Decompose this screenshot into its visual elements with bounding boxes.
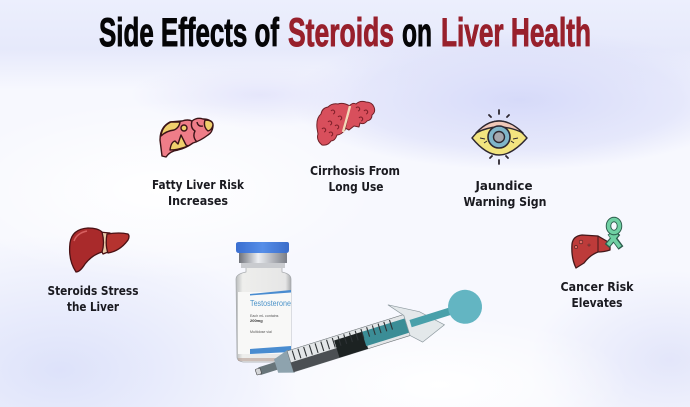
label: jaundice warning sign: Jaundice: [475, 179, 532, 193]
vial: testosterone: Each mL contains: [250, 314, 279, 318]
barrel: [287, 313, 416, 372]
label: cirrhosis from long use: Cirrhosis From: [310, 164, 400, 178]
label: cancer risk elevates: Elevates: [572, 296, 622, 310]
label: fatty liver risk increases: Increases: [168, 194, 228, 208]
flange: [388, 290, 447, 349]
title: [99, 11, 591, 55]
vial: testosterone: [236, 242, 291, 362]
label: cancer risk elevates: [560, 280, 634, 310]
label: fatty liver risk increases: [152, 178, 245, 208]
title: Side Effects of: [99, 11, 279, 55]
plunger: [409, 304, 463, 327]
syringe: [249, 278, 488, 392]
vial: testosterone: Testosterone: [250, 299, 291, 308]
label: steroids stress the liver: [48, 284, 138, 314]
label: cirrhosis from long use: [310, 164, 400, 194]
icon: jaundice eye: [472, 110, 527, 164]
title: Steroids: [288, 11, 394, 55]
label: jaundice warning sign: Warning Sign: [464, 195, 546, 209]
label: jaundice warning sign: [464, 179, 546, 209]
needle hub: [258, 362, 279, 375]
label: steroids stress the liver: the Liver: [67, 300, 119, 314]
vial: testosterone: Multidose vial: [250, 330, 272, 334]
label: fatty liver risk increases: Fatty Liver Risk: [152, 178, 245, 192]
icon: fatty liver: [160, 118, 213, 157]
label: cancer risk elevates: Cancer Risk: [560, 280, 634, 294]
title: Liver Health: [441, 11, 591, 55]
label: cirrhosis from long use: Long Use: [328, 180, 384, 194]
label: steroids stress the liver: Steroids Stress: [48, 284, 138, 298]
icon: liver with awareness ribbon: [572, 220, 621, 268]
title: on: [402, 11, 432, 55]
icon: healthy liver: [70, 228, 129, 272]
icon: cirrhosis liver: [317, 101, 375, 145]
vial: testosterone: 200mg: [250, 318, 263, 323]
